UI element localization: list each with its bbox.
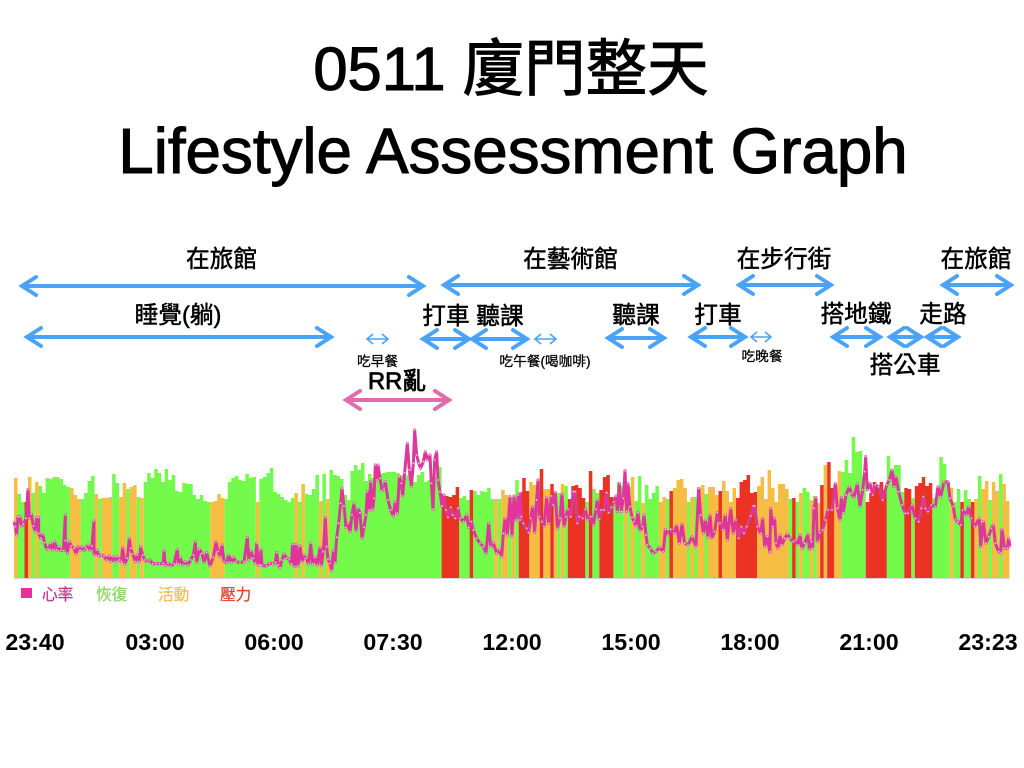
chart baseline bbox=[14, 578, 1010, 579]
label: walk: 走路 bbox=[919, 301, 967, 328]
arrow: walk bbox=[927, 328, 958, 346]
label: RR irregular: RR亂 bbox=[368, 368, 426, 395]
activity bars bbox=[14, 465, 1009, 578]
label: sleep: 睡覺(躺) bbox=[135, 302, 221, 329]
arrow: lunch bbox=[535, 334, 556, 344]
arrow: metro bbox=[833, 328, 880, 346]
label: taxi evening: 打車 bbox=[694, 302, 742, 329]
time axis labels: 06:00 bbox=[244, 629, 304, 655]
recovery bars bbox=[18, 437, 1002, 578]
legend: stress: 壓力 bbox=[220, 586, 251, 604]
label: metro: 搭地鐵 bbox=[820, 301, 892, 328]
label: dinner: 吃晚餐 bbox=[741, 349, 783, 364]
label: bus: 搭公車 bbox=[869, 352, 941, 379]
time axis labels: 15:00 bbox=[601, 629, 661, 655]
title: 0511 廈門整天 bbox=[313, 35, 709, 104]
time axis labels: 03:00 bbox=[125, 629, 185, 655]
label: lecture afternoon: 聽課 bbox=[612, 302, 660, 329]
arrow: taxi evening bbox=[691, 328, 745, 346]
time axis labels: 23:23 bbox=[958, 629, 1018, 655]
label: lunch: 吃午餐(喝咖啡) bbox=[499, 354, 591, 369]
time axis labels: 23:40 bbox=[5, 629, 65, 655]
label: hotel evening: 在旅館 bbox=[940, 246, 1012, 273]
label: lecture morning: 聽課 bbox=[476, 303, 524, 330]
chart: lifestyle assessment bars and heart rate bbox=[14, 430, 1010, 579]
label: breakfast: 吃早餐 bbox=[357, 354, 398, 369]
arrow: dinner bbox=[751, 332, 771, 342]
time axis labels: 18:00 bbox=[720, 629, 780, 655]
timeline annotations bbox=[22, 246, 1012, 409]
arrow: bus bbox=[890, 328, 921, 346]
time axis labels bbox=[5, 629, 1018, 655]
arrow: pedestrian street bbox=[739, 276, 831, 294]
bars bbox=[14, 437, 1009, 578]
title bbox=[118, 35, 908, 187]
arrow: lecture afternoon bbox=[608, 329, 664, 347]
label: hotel: 在旅館 bbox=[186, 246, 257, 273]
arrow: art museum bbox=[444, 276, 698, 294]
arrow: taxi morning bbox=[423, 330, 469, 348]
legend: heart rate: 心率 bbox=[42, 586, 73, 604]
legend bbox=[21, 586, 251, 604]
arrow: hotel evening bbox=[943, 276, 1011, 294]
arrow: hotel bbox=[22, 277, 423, 295]
time axis labels: 07:30 bbox=[363, 629, 423, 655]
label: taxi morning: 打車 bbox=[422, 303, 470, 330]
time axis labels: 21:00 bbox=[839, 629, 899, 655]
arrow: breakfast bbox=[367, 334, 388, 344]
label: art museum: 在藝術館 bbox=[523, 246, 618, 273]
heart rate line bbox=[14, 430, 1010, 571]
legend: activity: 活動 bbox=[158, 586, 189, 604]
label: pedestrian street: 在步行街 bbox=[737, 246, 831, 273]
stress bars bbox=[25, 462, 974, 578]
arrow: sleep bbox=[27, 328, 331, 346]
legend: recovery: 恢復 bbox=[96, 586, 128, 604]
time axis labels: 12:00 bbox=[482, 629, 542, 655]
title: Lifestyle Assessment Graph bbox=[118, 116, 908, 187]
arrow: RR irregular bbox=[346, 391, 449, 409]
arrow: lecture morning bbox=[472, 330, 527, 348]
legend: heart rate bbox=[21, 586, 73, 604]
